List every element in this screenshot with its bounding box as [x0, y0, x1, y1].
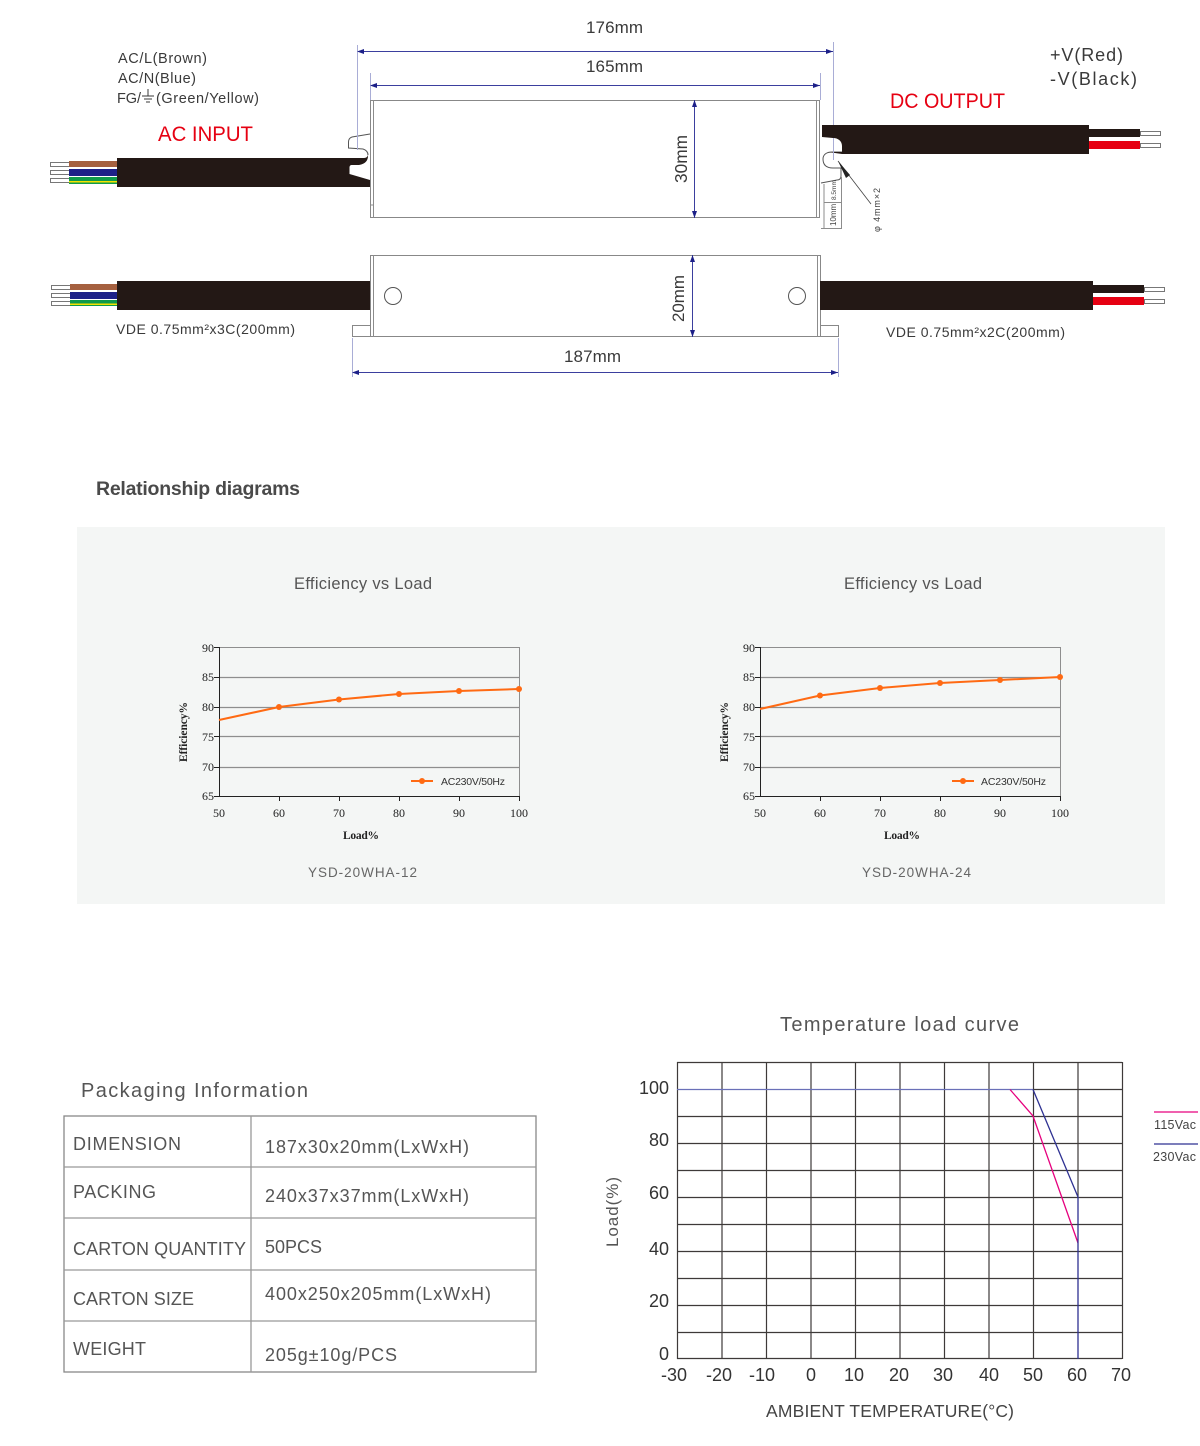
table: packaging information: 400x250x205mm(LxWxH) — [265, 1284, 491, 1304]
line chart: YSD-20WHA-24: 80 — [934, 806, 946, 820]
x axis labels: 40 — [979, 1365, 999, 1385]
line chart: YSD-20WHA-12: Efficiency% — [178, 702, 190, 762]
input wires — [52, 284, 117, 306]
dimension 176mm — [357, 18, 834, 160]
DC output wires — [1089, 129, 1160, 149]
line chart: YSD-20WHA-24: 80 — [743, 700, 755, 714]
legend — [1153, 1112, 1198, 1164]
x axis title: AMBIENT TEMPERATURE(°C) — [766, 1401, 1014, 1421]
curve: 115Vac — [1010, 1090, 1078, 1243]
wire colour legend: FG/ — [117, 91, 142, 107]
wire colour legend: AC/N(Blue) — [118, 71, 196, 87]
output wires — [1093, 285, 1164, 305]
line chart: YSD-20WHA-24: 70 — [743, 760, 755, 774]
x axis labels: 30 — [933, 1365, 953, 1385]
line chart: YSD-20WHA-24: 70 — [874, 806, 886, 820]
line chart: YSD-20WHA-12: 90 — [202, 641, 214, 655]
mounting hole dimensions — [821, 161, 882, 232]
y axis labels: 80 — [649, 1130, 669, 1150]
line chart: YSD-20WHA-24: AC230V/50Hz — [981, 776, 1046, 788]
table: packaging information — [64, 1116, 536, 1372]
chart title left: Efficiency vs Load — [294, 575, 432, 593]
dimension 187mm: 187mm — [564, 347, 621, 366]
curve: 230Vac — [1033, 1090, 1078, 1359]
heading: packaging information: Packaging Information — [81, 1080, 308, 1102]
model label right: YSD-20WHA-24 — [862, 865, 971, 880]
y axis labels: 20 — [649, 1291, 669, 1311]
table: packaging information: CARTON SIZE — [73, 1289, 194, 1309]
dimension 165mm: 165mm — [586, 57, 643, 76]
x axis labels: -20 — [706, 1365, 732, 1385]
DC polarity legend — [1050, 45, 1137, 89]
model label left: YSD-20WHA-12 — [308, 865, 417, 880]
panel: efficiency charts — [77, 527, 1165, 904]
panel: top view driver diagram — [50, 18, 1160, 232]
AC input cable and clip — [117, 134, 370, 187]
line chart: YSD-20WHA-12: 70 — [202, 760, 214, 774]
wire colour legend — [117, 51, 259, 107]
output cable spec: VDE 0.75mm²x2C(200mm) — [886, 324, 1065, 340]
dimension 30mm: 30mm — [671, 135, 691, 183]
x axis labels: -10 — [749, 1365, 775, 1385]
DC output heading: DC OUTPUT — [890, 90, 1005, 113]
y axis title: Load(%) — [603, 1177, 622, 1247]
x axis labels: 0 — [806, 1365, 816, 1385]
heading: relationship diagrams: Relationship diagrams — [96, 478, 300, 500]
dimension 30mm — [671, 100, 697, 218]
x axis labels: 10 — [844, 1365, 864, 1385]
dimension 20mm — [669, 255, 695, 337]
table: packaging information: WEIGHT — [73, 1339, 146, 1359]
line chart: YSD-20WHA-24: Efficiency% — [719, 702, 731, 762]
line chart: YSD-20WHA-24: 100 — [1051, 806, 1069, 820]
DC polarity legend: -V(Black) — [1050, 69, 1137, 89]
mounting hole dimensions: 10mm — [829, 203, 838, 226]
output cable — [820, 281, 1093, 310]
line chart: YSD-20WHA-12: 65 — [202, 789, 214, 803]
line chart: YSD-20WHA-24: Load% — [884, 830, 920, 842]
line chart: YSD-20WHA-12: 100 — [510, 806, 528, 820]
line chart: YSD-20WHA-12: 85 — [202, 670, 214, 684]
table: packaging information: 50PCS — [265, 1237, 322, 1257]
y axis labels: 40 — [649, 1239, 669, 1259]
legend: 115Vac — [1154, 1118, 1196, 1132]
panel: bottom view driver diagram — [52, 255, 1164, 377]
line chart: YSD-20WHA-24: 60 — [814, 806, 826, 820]
y axis labels: 0 — [659, 1344, 669, 1364]
dimension 187mm — [352, 338, 838, 377]
table: packaging information: CARTON QUANTITY — [73, 1239, 246, 1259]
line chart: YSD-20WHA-12: 70 — [333, 806, 345, 820]
AC input heading: AC INPUT — [158, 123, 253, 146]
input cable spec: VDE 0.75mm²x3C(200mm) — [116, 321, 295, 337]
y axis labels: 100 — [639, 1078, 669, 1098]
AC input wires — [50, 161, 117, 184]
chart title right: Efficiency vs Load — [844, 575, 982, 593]
line chart: YSD-20WHA-24: 50 — [754, 806, 766, 820]
mounting hole dimensions: φ 4mm×2 — [872, 188, 882, 232]
line chart: YSD-20WHA-24: 75 — [743, 730, 755, 744]
y axis labels: 60 — [649, 1183, 669, 1203]
dimension 165mm — [370, 57, 820, 100]
driver body side — [370, 100, 820, 218]
line chart: YSD-20WHA-24: 90 — [743, 641, 755, 655]
x axis labels: -30 — [661, 1365, 687, 1385]
x axis labels: 50 — [1023, 1365, 1043, 1385]
legend: 230Vac — [1153, 1150, 1196, 1164]
line chart: YSD-20WHA-12: 80 — [202, 700, 214, 714]
dimension 20mm: 20mm — [669, 275, 688, 322]
grid — [677, 1062, 1122, 1359]
table: packaging information: 187x30x20mm(LxWxH) — [265, 1137, 469, 1157]
y axis labels — [639, 1078, 669, 1364]
line chart: YSD-20WHA-24 — [719, 641, 1069, 842]
line chart: YSD-20WHA-12: 75 — [202, 730, 214, 744]
dimension 176mm: 176mm — [586, 18, 643, 37]
line chart: YSD-20WHA-12: 50 — [213, 806, 225, 820]
DC polarity legend: +V(Red) — [1050, 45, 1123, 65]
table: packaging information: PACKING — [73, 1182, 156, 1202]
wire colour legend: (Green/Yellow) — [156, 91, 259, 107]
heading: temperature load curve: Temperature load curve — [780, 1014, 1019, 1036]
line chart: YSD-20WHA-12: 80 — [393, 806, 405, 820]
line chart: YSD-20WHA-12: AC230V/50Hz — [441, 776, 505, 788]
wire colour legend: AC/L(Brown) — [118, 51, 207, 67]
chart: temperature load curve — [603, 1062, 1198, 1421]
input cable — [117, 281, 370, 310]
line chart: YSD-20WHA-12: 90 — [453, 806, 465, 820]
table: packaging information: 240x37x37mm(LxWxH) — [265, 1186, 469, 1206]
DC output cable and clip — [821, 125, 1089, 183]
line chart: YSD-20WHA-12: Load% — [343, 830, 379, 842]
driver body bottom — [352, 255, 838, 337]
mounting hole dimensions: 8.5mm — [831, 180, 838, 200]
x axis labels: 70 — [1111, 1365, 1131, 1385]
table: packaging information: DIMENSION — [73, 1134, 181, 1154]
x axis labels: 20 — [889, 1365, 909, 1385]
line chart: YSD-20WHA-24: 65 — [743, 789, 755, 803]
x axis labels — [661, 1365, 1131, 1385]
line chart: YSD-20WHA-24: 85 — [743, 670, 755, 684]
line chart: YSD-20WHA-24: 90 — [994, 806, 1006, 820]
x axis labels: 60 — [1067, 1365, 1087, 1385]
line chart: YSD-20WHA-12 — [178, 641, 528, 842]
table: packaging information: 205g±10g/PCS — [265, 1345, 397, 1365]
line chart: YSD-20WHA-12: 60 — [273, 806, 285, 820]
